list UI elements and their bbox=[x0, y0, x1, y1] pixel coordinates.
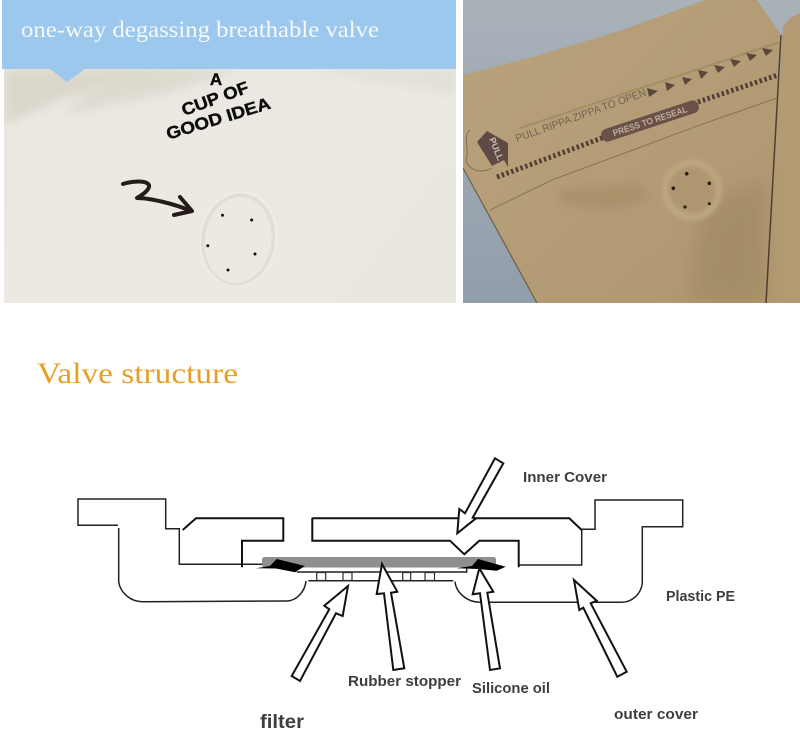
icon: kraft bag valve with vent holes bbox=[665, 163, 719, 217]
label: filter: filter bbox=[260, 712, 305, 733]
label: press to reseal: PRESS TO RESEAL bbox=[611, 104, 689, 138]
printed slogan: A bbox=[210, 70, 222, 89]
inner cover outline bbox=[183, 518, 582, 567]
label: pull rippa zippa to open: PULL RIPPA ZIPPA TO OPEN bbox=[514, 87, 648, 145]
arrow: silicone oil bbox=[473, 568, 500, 670]
label: rubber stopper: Rubber stopper bbox=[348, 674, 461, 690]
zipper checker line bbox=[497, 75, 778, 177]
direction triangles bbox=[647, 48, 773, 97]
silicone oil: right bbox=[457, 559, 506, 571]
arrow: filter bbox=[292, 586, 348, 681]
icon: pull tab bbox=[466, 130, 508, 171]
icon: hand-drawn arrow bbox=[123, 182, 192, 215]
zip band folds bbox=[490, 98, 777, 210]
printed slogan bbox=[166, 73, 272, 138]
printed slogan: CUP OF bbox=[179, 78, 251, 120]
filter pads bbox=[317, 572, 434, 580]
label: press to reseal bbox=[600, 99, 700, 143]
heading banner: one-way degassing breathable valve bbox=[21, 17, 379, 42]
icon: embossed valve with vent holes bbox=[201, 194, 275, 286]
label: inner cover: Inner Cover bbox=[523, 470, 607, 486]
arrow: inner cover bbox=[457, 458, 503, 533]
label: silicone oil: Silicone oil bbox=[472, 681, 550, 697]
icon: pull tab: PULL bbox=[487, 136, 506, 162]
outer cover outline bbox=[78, 499, 683, 602]
arrow: rubber stopper bbox=[377, 564, 404, 670]
rubber stopper bbox=[262, 557, 496, 568]
printed slogan: GOOD IDEA bbox=[164, 94, 273, 144]
silicone oil: left bbox=[256, 559, 305, 572]
label: outer cover: outer cover bbox=[614, 707, 698, 723]
section title: Valve structure bbox=[37, 357, 238, 390]
heading banner bbox=[2, 0, 456, 82]
label: plastic PE: Plastic PE bbox=[666, 589, 735, 605]
diagram labels bbox=[260, 470, 735, 733]
panel: white bag photo bbox=[4, 69, 456, 303]
panel: kraft bag photo bbox=[463, 0, 800, 303]
valve cross-section diagram bbox=[78, 458, 683, 681]
arrow: outer cover bbox=[574, 580, 627, 677]
